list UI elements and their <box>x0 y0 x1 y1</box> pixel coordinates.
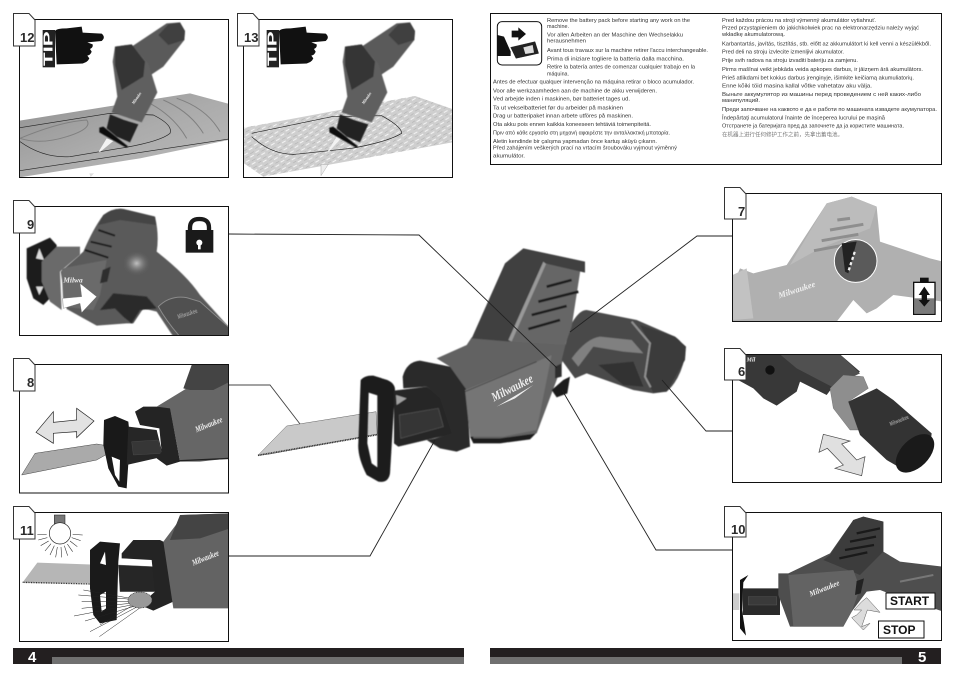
text column right: Отстранете ја батеријата пред да започнете да ја користите машината. <box>722 124 904 130</box>
text column left <box>493 18 708 160</box>
body <box>437 330 567 438</box>
text column right: Îndepărtaţi acumulatorul înainte de începerea lucrului pe maşină <box>721 114 886 121</box>
icon: light bulb <box>37 515 83 557</box>
text column right: Przed przystąpieniem do jakichkolwiek prac na elektronarzędziu należy wyjąć <box>722 25 919 31</box>
frame <box>20 206 228 336</box>
text column left: Ved arbejde inden i maskinen, bør batteriet tages ud. <box>493 97 630 103</box>
guard <box>90 542 120 623</box>
text column right: Выньте аккумулятор из машины перед проведением с ней каких-либо <box>722 91 921 98</box>
text column right: Prieš atlikdami bet kokius darbus įrenginyje, išimkite keičiamą akumuliatorių. <box>722 75 914 81</box>
text column left: machine. <box>547 24 569 30</box>
text column right <box>721 18 937 138</box>
number tag 9: 9 <box>27 217 34 232</box>
arrow <box>852 598 880 630</box>
TIP hand icon: TIP <box>266 30 280 66</box>
panel 9: lock: Milwaukee <box>177 308 199 321</box>
number tag 7 <box>724 188 746 219</box>
blade <box>22 444 108 475</box>
label STOP <box>878 621 924 638</box>
magnified indicator circle: ■ ■ ■ ■ <box>846 251 857 271</box>
saw body: Mil <box>746 358 756 364</box>
saw housing <box>61 209 230 337</box>
text column left: Avant tous travaux sur la machine retirer l'accu interchangeable. <box>547 48 708 54</box>
text column left: Ta ut vekselbatteriet før du arbeider på maskinen <box>493 104 623 111</box>
body <box>157 365 230 462</box>
frame <box>20 20 228 178</box>
text column right: Karbantartás, javítás, tisztítás, stb. előtt az akkumulátort ki kell venni a készülékből. <box>722 41 931 47</box>
text column right: Pred každou prácou na stroji výmenný akumulátor vytiahnuť. <box>722 18 876 24</box>
arrow <box>63 283 97 313</box>
number tag 13: 13 <box>244 30 258 45</box>
text column right: Pirms mašīnai veikt jebkāda veida apkopes darbus, ir jāizņem ārā akumulātors. <box>722 67 923 73</box>
number tag 11 <box>14 506 35 539</box>
boot <box>122 540 173 611</box>
body: Milwaukee <box>190 548 220 568</box>
number tag 6: 6 <box>738 364 745 379</box>
logo: Milwa <box>62 275 83 284</box>
text column left: Prima di iniziare togliere la batteria dalla macchina. <box>547 56 684 62</box>
page bar right: 5 <box>918 649 926 666</box>
collar <box>830 375 868 430</box>
double arrow <box>819 434 865 476</box>
text column right: Prije svih radova na stroju izvaditi bateriju za zamjenu. <box>722 58 858 64</box>
panel 12: tip with wood: Milwaukee <box>130 91 142 105</box>
panel 13: tip with metal: Milwaukee <box>360 91 372 105</box>
icon: remove battery <box>497 22 542 65</box>
label STOP: STOP <box>883 623 915 637</box>
handle and battery <box>562 310 686 393</box>
text column right: Преди започване на каквото е да е работи по машината извадете акумулатора. <box>722 107 937 113</box>
text column right: wkładkę akumulatorową. <box>721 32 785 38</box>
number tag 7: 7 <box>738 204 745 219</box>
TIP hand icon <box>42 27 104 67</box>
text column left: Drag ur batteripaket innan arbete utföres på maskinen. <box>493 113 633 120</box>
double arrow <box>36 408 94 443</box>
guard and nose <box>740 575 780 636</box>
page bar left <box>13 648 464 666</box>
text column left: Remove the battery pack before starting any work on the <box>547 18 690 24</box>
frame <box>732 354 942 482</box>
frame <box>732 194 942 322</box>
text column right: манипуляций. <box>722 97 760 104</box>
frame <box>732 512 942 640</box>
body <box>163 513 230 608</box>
saw <box>99 22 185 148</box>
panel 6: battery <box>724 348 942 482</box>
blade <box>328 137 341 152</box>
icon: lock <box>186 219 213 253</box>
frame <box>20 512 228 642</box>
label START <box>886 593 935 609</box>
panel 13: tip with metal <box>238 14 452 178</box>
wood board <box>13 93 233 178</box>
battery <box>158 297 230 337</box>
saw <box>329 22 415 148</box>
trigger and grip <box>100 293 157 323</box>
guard <box>103 416 130 488</box>
frame <box>20 364 228 493</box>
panel 9: lock <box>14 200 230 337</box>
blade <box>23 562 90 584</box>
instruction text box <box>490 14 942 164</box>
switch and trigger <box>552 363 570 397</box>
boot <box>135 407 180 466</box>
motor housing <box>472 248 585 345</box>
number tag 10: 10 <box>731 522 745 537</box>
logo <box>488 371 536 407</box>
number tag 8: 8 <box>27 375 34 390</box>
panel 8: blade change <box>14 358 230 493</box>
panel 11: work light <box>14 506 230 642</box>
text column left: herausnehmen <box>547 39 586 45</box>
grey strip <box>733 593 739 610</box>
TIP hand icon <box>266 27 328 67</box>
page bar right <box>490 648 941 666</box>
saw housing: Milwaukee <box>807 578 841 599</box>
nose <box>394 387 453 447</box>
text column left: akumulátor. <box>493 154 525 160</box>
frame <box>244 20 452 178</box>
number tag 12 <box>14 14 35 46</box>
text column left: Před zahájením veškerých prací na vrtacím šroubováku vyjmout výměnný <box>493 146 677 152</box>
light rays <box>74 590 142 637</box>
text column left: Aletin kendinde bir çalışma yapmadan önce kartuş aküyü çıkarın. <box>493 139 657 145</box>
text column left: Antes de efectuar qualquer intervenção na máquina retirar o bloco acumulador. <box>493 80 694 86</box>
faded saw <box>730 197 943 322</box>
icon: battery level <box>914 278 935 314</box>
blade <box>258 412 377 455</box>
body: Milwaukee <box>193 414 224 434</box>
lower body <box>470 433 537 443</box>
number tag 11: 11 <box>20 523 34 538</box>
nose <box>127 427 163 465</box>
text column left: Retire la batería antes de comenzar cualquier trabajo en la <box>547 65 696 71</box>
guard <box>27 238 80 310</box>
panel 7: charge indicator <box>724 188 943 322</box>
battery <box>848 388 934 473</box>
text column left: Voor alle werkzaamheden aan de machine de akku verwijderen. <box>493 88 657 94</box>
number tag 13 <box>238 14 259 46</box>
battery: Milwaukee <box>889 415 910 428</box>
number tag 6 <box>724 348 746 380</box>
page bar left: 4 <box>28 649 37 666</box>
leader lines <box>228 234 732 556</box>
text column right: Enne kõiki töid masina kallal võtke vahetatav aku välja. <box>722 84 872 90</box>
number tag 8 <box>14 358 35 391</box>
nose <box>118 565 157 592</box>
saw body <box>735 354 860 406</box>
number tag 10 <box>724 506 746 537</box>
panel 10: start stop <box>724 506 943 640</box>
logo: Milwaukee <box>488 371 536 405</box>
text column left: Πριν από κάθε εργασία στη μηχανή αφαιρέστε την ανταλλακτική μπαταρία. <box>493 129 670 136</box>
text column left: Ota akku pois ennen kaikkia koneeseen tehtäviä toimenpiteitä. <box>493 122 651 128</box>
front guard <box>358 376 395 482</box>
TIP hand icon: TIP <box>42 30 56 66</box>
label START: START <box>890 594 930 608</box>
text column left: Vor allen Arbeiten an der Maschine den Wechselakku <box>547 32 683 38</box>
boot <box>403 361 470 452</box>
number tag 9 <box>14 200 35 233</box>
faded saw: Milwaukee <box>776 279 817 301</box>
metal sheet <box>244 96 452 177</box>
text column right: Pred deli na stroju izvlecite izmenljivi akumulator. <box>722 50 844 56</box>
main saw illustration <box>258 248 686 482</box>
number tag 12: 12 <box>20 30 34 45</box>
saw housing <box>778 517 943 627</box>
text column right: 在机器上进行任何修护工作之前，先拿出蓄电池。 <box>722 130 843 138</box>
magnified indicator circle <box>834 240 877 282</box>
blade <box>99 138 113 152</box>
panel 12: tip with wood <box>13 14 233 178</box>
text column left: máquina. <box>547 71 569 77</box>
